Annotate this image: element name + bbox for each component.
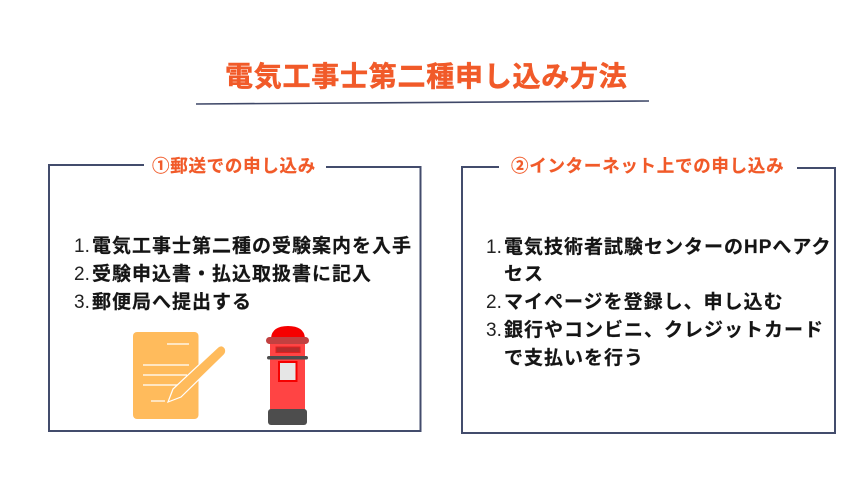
title underline (196, 101, 649, 104)
steps list: online: 3. (486, 320, 502, 341)
steps list: online (486, 235, 831, 369)
steps list: mail (74, 234, 412, 313)
steps list: online: マイページを登録し、申し込む (504, 291, 784, 313)
steps list: mail: 受験申込書・払込取扱書に記入 (92, 262, 372, 285)
panel frame: mail (49, 165, 420, 431)
steps list: online: で支払いを行う (504, 347, 644, 369)
steps list: online: 電気技術者試験センターのHPへアク (504, 235, 831, 258)
icon: red post box (266, 326, 309, 425)
panel: online application (462, 156, 835, 433)
steps list: online: セス (504, 264, 544, 285)
steps list: mail: 2. (74, 264, 90, 285)
steps list: mail: 郵便局へ提出する (92, 291, 252, 313)
heading: mail: ①郵送での申し込み (152, 156, 316, 176)
steps list: online: 1. (486, 237, 502, 258)
steps list: online: 2. (486, 292, 502, 313)
steps list: online: 銀行やコンビニ、クレジットカード (504, 319, 824, 341)
title: 電気工事士第二種申し込み方法 (225, 61, 628, 92)
icon: document and pen (133, 332, 226, 419)
panel frame: online (462, 167, 835, 433)
steps list: mail: 電気工事士第二種の受験案内を入手 (92, 234, 412, 257)
heading: online: ②インターネット上での申し込み (511, 156, 784, 176)
panel: mail application (49, 156, 420, 431)
steps list: mail: 1. (74, 236, 90, 257)
steps list: mail: 3. (74, 292, 90, 313)
